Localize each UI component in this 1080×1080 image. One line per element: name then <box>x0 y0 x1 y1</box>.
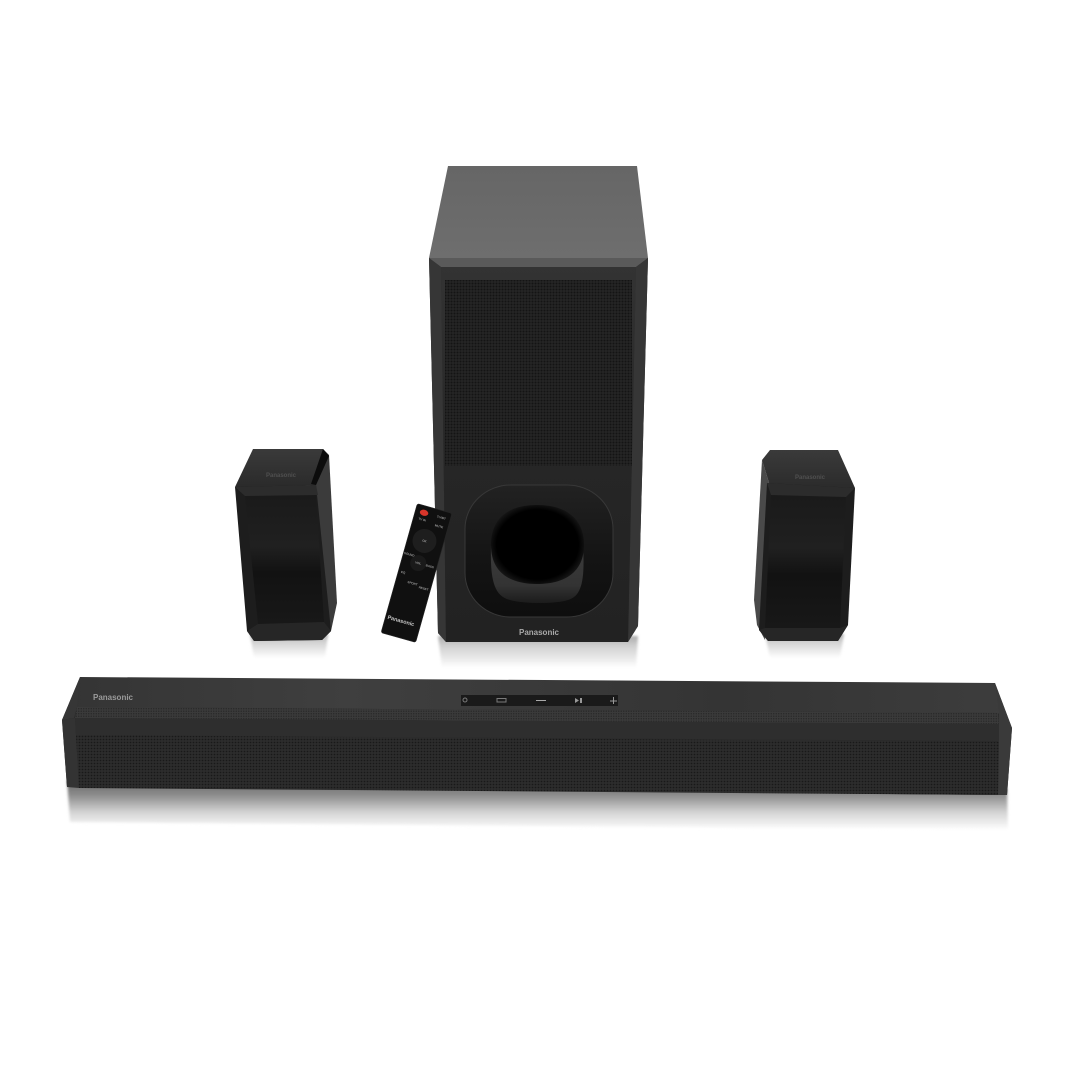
remote labels: SOUND <box>404 551 416 558</box>
right satellite speaker <box>754 450 855 658</box>
remote labels: RESET <box>418 585 429 592</box>
subwoofer <box>429 166 648 668</box>
remote labels: T.V/BT <box>436 515 447 521</box>
remote labels: VOL <box>415 560 422 566</box>
right speaker logo: Panasonic <box>795 475 826 481</box>
right speaker side <box>754 460 770 640</box>
icon: volume up <box>610 697 617 704</box>
remote power button <box>419 509 429 517</box>
left satellite speaker <box>235 449 337 658</box>
soundbar logo: Panasonic <box>93 693 134 702</box>
left speaker top <box>235 449 329 488</box>
port opening <box>491 505 584 584</box>
remote control <box>381 504 452 642</box>
subwoofer grille <box>445 280 632 466</box>
touch control panel <box>461 695 618 706</box>
icon: input <box>497 698 506 702</box>
right speaker front <box>759 483 855 641</box>
remote logo: Panasonic <box>387 615 415 628</box>
remote labels: TV IN <box>418 517 426 523</box>
icon: play pause <box>575 698 579 703</box>
subwoofer logo: Panasonic <box>519 628 560 637</box>
remote labels: SPORT <box>407 580 418 587</box>
remote body <box>381 504 452 642</box>
left speaker side <box>310 449 337 640</box>
port surround <box>465 485 613 617</box>
icon: volume down <box>536 700 546 701</box>
remote labels: OK <box>422 538 428 544</box>
soundbar right end cap <box>995 683 1012 795</box>
right speaker top <box>762 450 855 491</box>
icon: power <box>463 698 467 702</box>
remote labels: BASS <box>425 563 434 569</box>
soundbar upper mesh band <box>75 707 999 724</box>
soundbar main grille <box>76 735 999 795</box>
left speaker front <box>235 485 331 641</box>
soundbar top face <box>62 677 1012 728</box>
soundbar reflection <box>67 780 1008 830</box>
subwoofer reflection <box>438 636 638 668</box>
subwoofer top face <box>429 166 648 258</box>
subwoofer cabinet front <box>429 258 648 642</box>
left speaker reflection <box>250 634 328 658</box>
right speaker reflection <box>765 634 844 658</box>
left speaker logo: Panasonic <box>266 473 297 479</box>
soundbar centre strip <box>75 718 999 741</box>
remote labels: MUTE <box>434 523 444 529</box>
soundbar front <box>62 707 1012 795</box>
remote volume ring <box>408 553 428 573</box>
remote labels <box>396 509 449 592</box>
port lip <box>491 545 584 603</box>
soundbar left end cap <box>62 677 80 720</box>
remote navigation ring <box>410 526 439 556</box>
remote labels: EQ <box>401 570 406 575</box>
soundbar <box>62 677 1012 830</box>
